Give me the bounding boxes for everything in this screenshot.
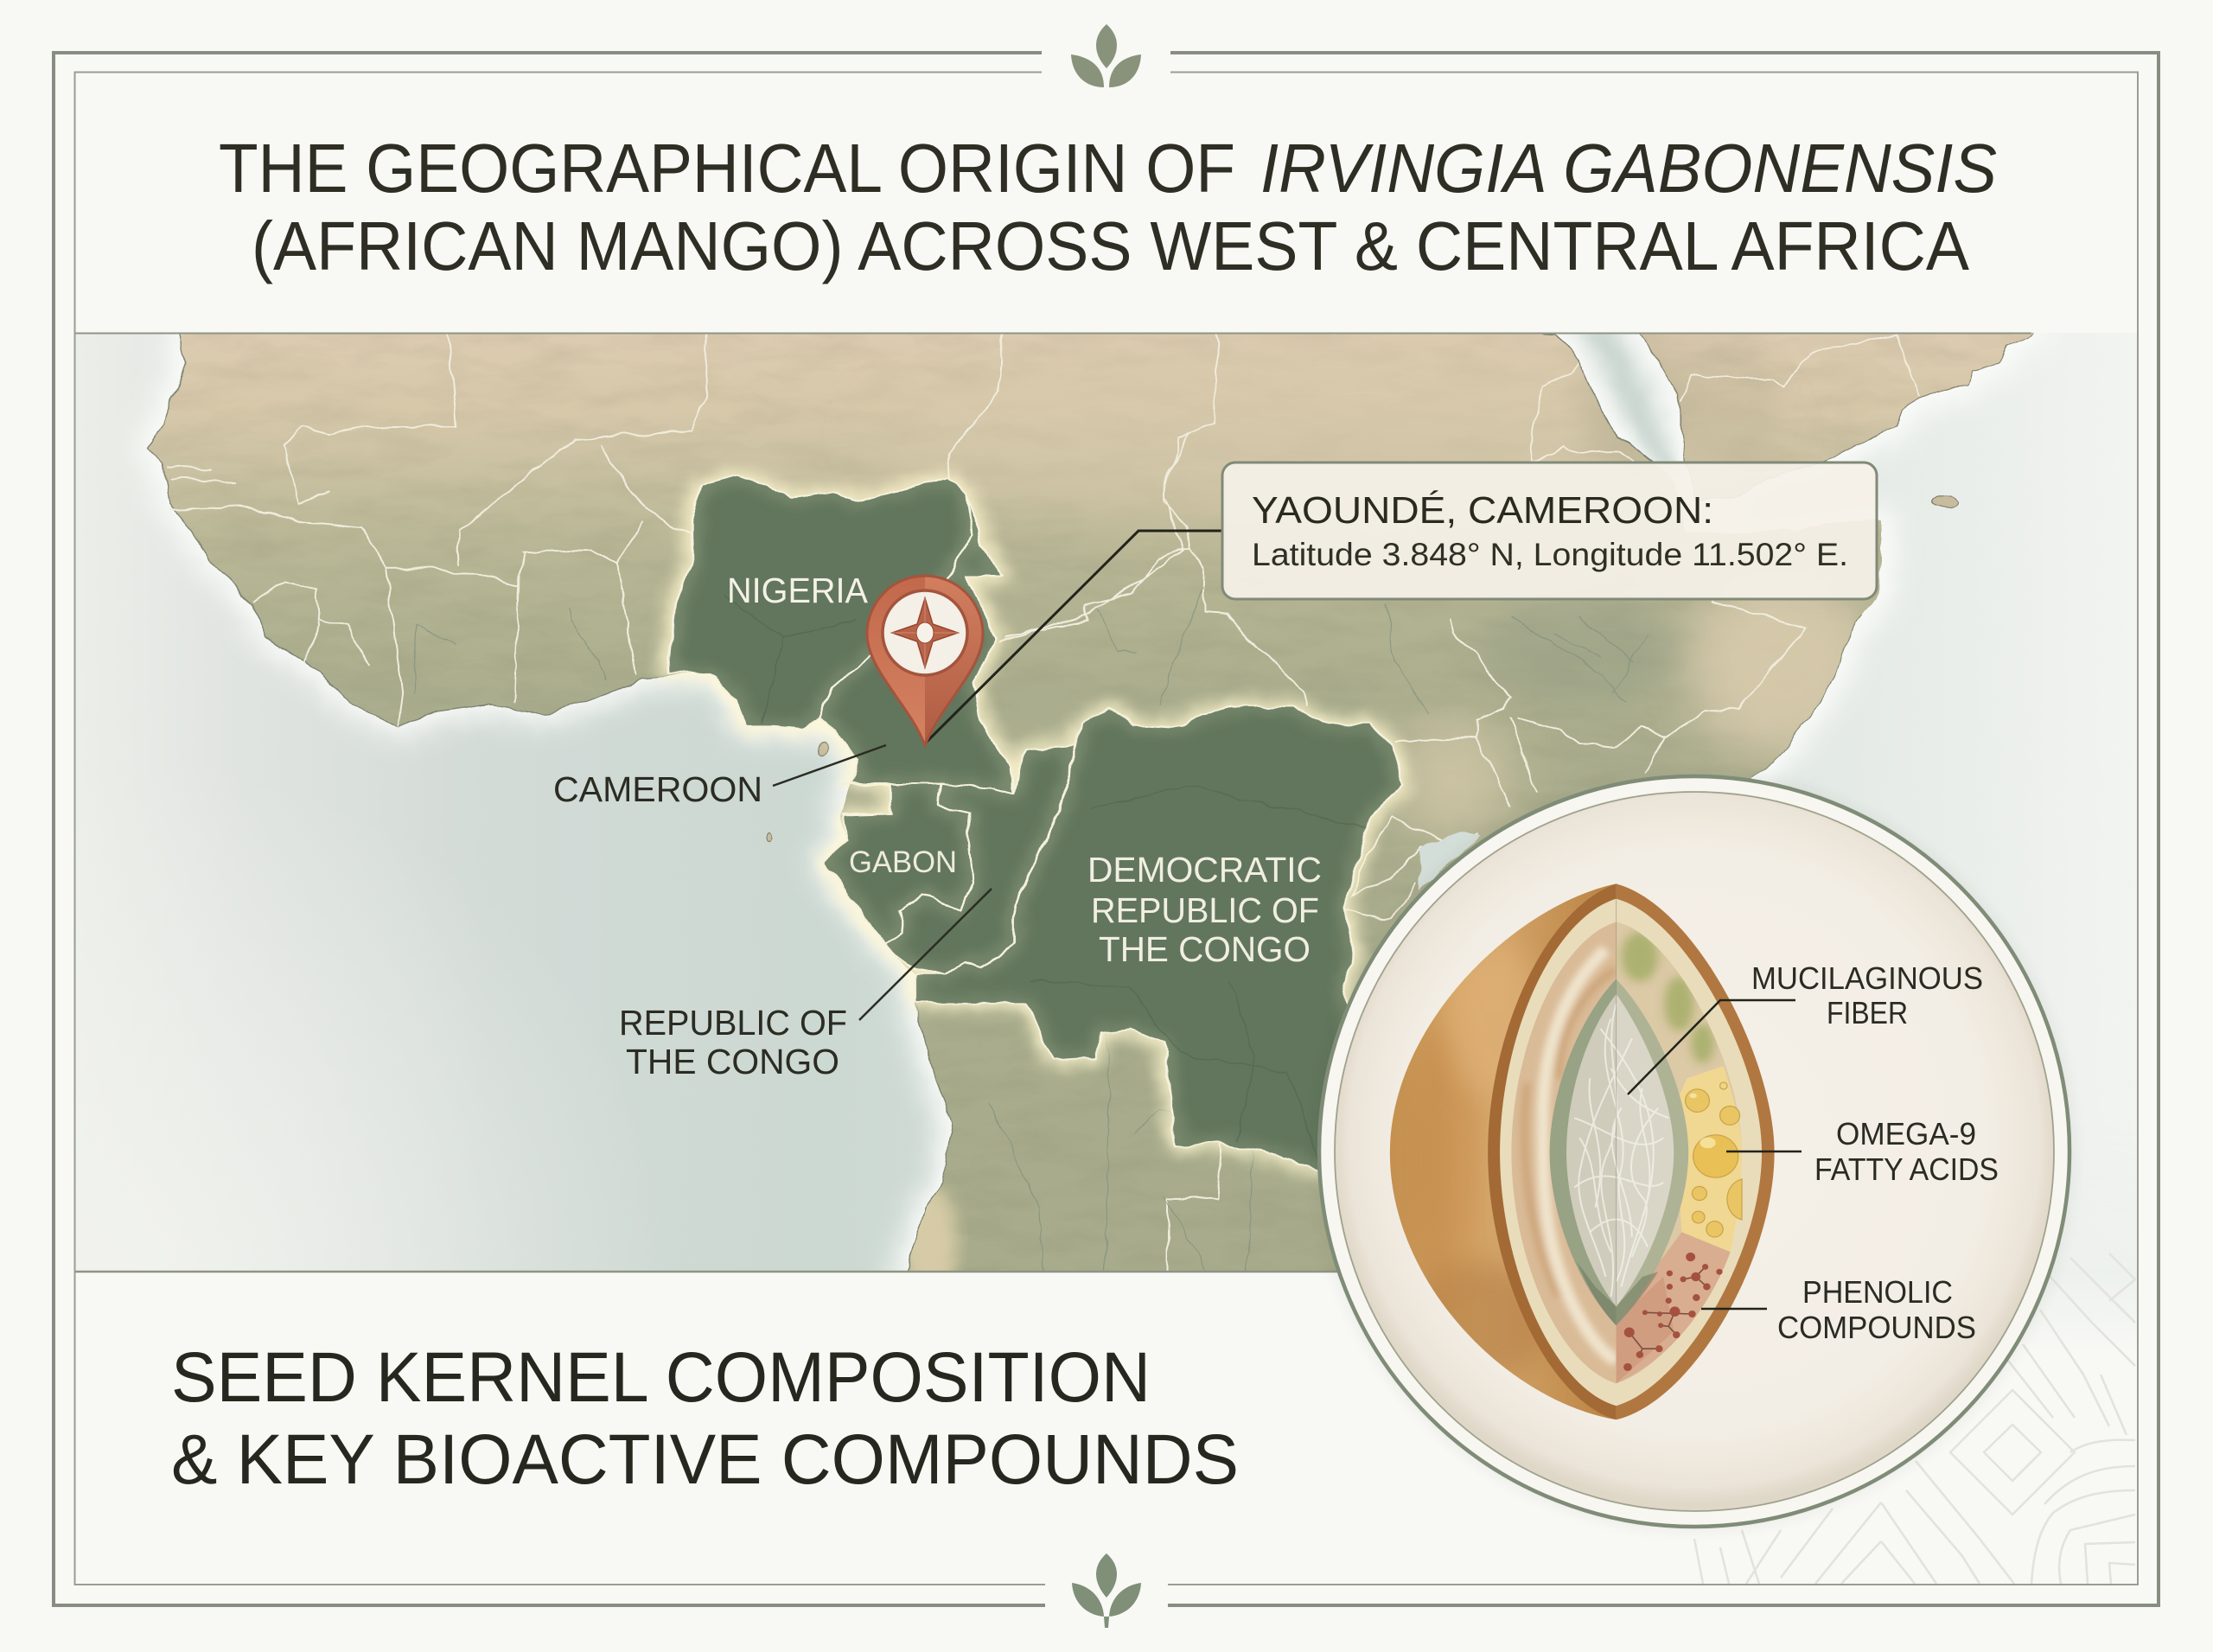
cream layer xyxy=(1500,899,1762,1406)
icon: bottom leaf ornament xyxy=(1072,1553,1141,1628)
title xyxy=(219,130,1997,284)
label: Cameroon with leader xyxy=(553,745,886,809)
label: Democratic Republic of the Congo: REPUBLIC OF xyxy=(1091,890,1319,930)
country fills xyxy=(667,476,1403,1177)
title: (AFRICAN MANGO) ACROSS WEST & CENTRAL AFRICA xyxy=(252,207,1970,284)
label: Nigeria: NIGERIA xyxy=(727,571,869,610)
label: Democratic Republic of the Congo: DEMOCRATIC xyxy=(1087,850,1322,890)
shell rim xyxy=(1488,883,1617,1419)
callout: phenolic compounds: COMPOUNDS xyxy=(1777,1310,1976,1345)
label: Republic of the Congo with leader: REPUBLIC OF xyxy=(619,1003,847,1043)
callout: mucilaginous fiber: FIBER xyxy=(1827,995,1908,1030)
callout: Yaoundé coordinates: Latitude 3.848° N, Longitude 11.502° E. xyxy=(1252,537,1848,572)
callout: phenolic compounds: PHENOLIC xyxy=(1802,1274,1953,1310)
tan layer left xyxy=(1511,922,1617,1383)
label: Democratic Republic of the Congo xyxy=(1087,850,1322,969)
callout: phenolic compounds xyxy=(1701,1274,1976,1345)
rivers xyxy=(414,608,1254,1271)
panel: map xyxy=(52,311,2161,1305)
icon: top leaf ornament xyxy=(1071,24,1141,87)
oil droplets xyxy=(1686,1082,1742,1237)
country borders xyxy=(667,476,1403,1177)
callout: Yaoundé coordinates: YAOUNDÉ, CAMEROON: xyxy=(1252,489,1713,532)
callout: mucilaginous fiber xyxy=(1628,960,1983,1094)
map frame lines xyxy=(75,334,2031,1272)
callout: omega-9 fatty acids: OMEGA-9 xyxy=(1836,1116,1976,1151)
seed kernel illustration xyxy=(1390,883,1775,1419)
yellow oil zone xyxy=(1674,1066,1742,1252)
islands xyxy=(768,496,1958,842)
title: THE GEOGRAPHICAL ORIGIN OF xyxy=(219,130,1235,207)
fade below map on the right xyxy=(1729,1272,2138,1354)
map labels xyxy=(553,571,1322,1081)
label: Gabon: GABON xyxy=(849,845,957,879)
outer shell xyxy=(1390,883,1617,1419)
label: Cameroon with leader: CAMEROON xyxy=(553,769,762,809)
ocean xyxy=(52,311,2161,1288)
icon: location pin with compass xyxy=(867,576,983,745)
borders: west and central Africa xyxy=(167,333,1221,1284)
title: IRVINGIA GABONENSIS xyxy=(1260,130,1997,207)
green seed coat xyxy=(1550,979,1617,1325)
callout: omega-9 fatty acids: FATTY ACIDS xyxy=(1814,1151,1999,1187)
callout: mucilaginous fiber: MUCILAGINOUS xyxy=(1751,960,1983,996)
pink phenolic zone xyxy=(1617,1232,1731,1383)
panel: seed cross-section medallion xyxy=(1317,774,2072,1529)
Lake Victoria xyxy=(1419,833,1480,892)
section heading: seed kernel composition: & KEY BIOACTIVE COMPOUNDS xyxy=(171,1420,1239,1499)
phenolic molecules xyxy=(1629,1266,1706,1355)
fibrous core xyxy=(1566,994,1617,1306)
borders: great lakes xyxy=(1347,818,1477,920)
land masses xyxy=(149,333,2033,1271)
label: Republic of the Congo with leader: THE CONGO xyxy=(626,1042,839,1081)
cream halo xyxy=(667,476,1403,1177)
tan layer right xyxy=(1617,922,1742,1383)
highlighted countries xyxy=(667,476,1403,1177)
section heading: seed kernel composition xyxy=(171,1338,1239,1499)
callout: omega-9 fatty acids xyxy=(1726,1116,1999,1187)
label: Democratic Republic of the Congo: THE CONGO xyxy=(1099,929,1311,969)
callout: Yaoundé coordinates xyxy=(1222,462,1877,599)
section heading: seed kernel composition: SEED KERNEL COMPOSITION xyxy=(171,1338,1151,1417)
core fibers xyxy=(1574,1004,1668,1297)
borders: east Africa xyxy=(1000,432,1807,807)
corner ornament pattern xyxy=(1694,1253,2135,1584)
callout leader line xyxy=(925,531,1222,743)
label: Republic of the Congo with leader xyxy=(619,889,992,1081)
